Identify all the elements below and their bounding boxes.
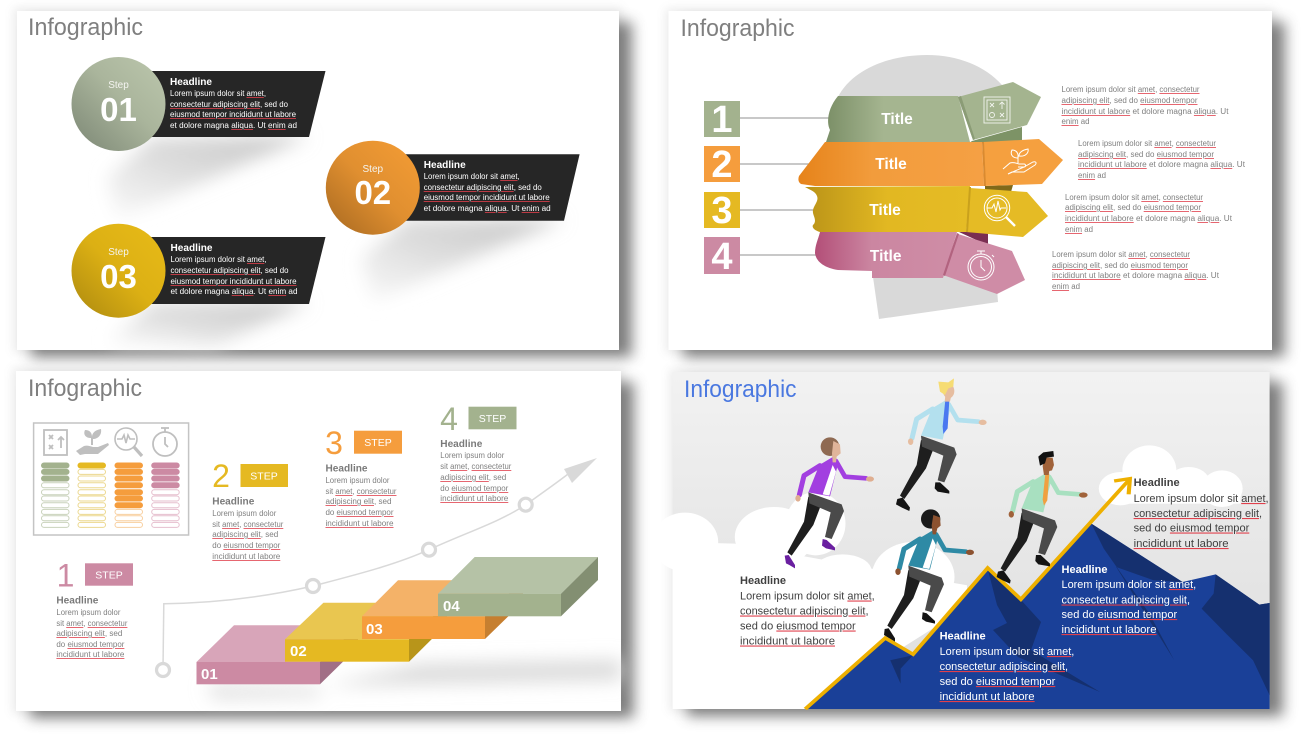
step label 3 [325,425,402,528]
text block upper mountain: sed do eiusmod tempor [1062,609,1178,621]
step 03: Headline [170,242,213,254]
step label 3: incididunt ut labore [326,519,394,528]
text block lower mountain: Lorem ipsum dolor sit amet, [940,646,1074,658]
description 3: Lorem ipsum dolor sit amet, consectetur [1065,193,1203,202]
number tiles [704,99,740,278]
step 01: Headline [170,76,212,88]
step label 2: sit amet, consectetur [212,520,284,529]
band 2 [798,139,1063,186]
mountain shaded facets upper and right [890,524,1270,695]
band 3: Title [869,202,901,219]
step label 4: STEP [479,413,506,425]
text block lower mountain: consectetur adipiscing elit, [940,661,1068,673]
text block left cloud: Headline [740,575,786,587]
clouds [652,445,1243,709]
step 02: 02 [354,174,391,211]
step 01: et dolore magna aliqua. Ut enim ad [170,121,297,130]
connector lines [740,118,830,255]
text block lower mountain: sed do eiusmod tempor [940,676,1056,688]
text block summit: incididunt ut labore [1134,538,1229,550]
step label 1: do eiusmod tempor [56,640,125,649]
number tiles: 4 [711,236,733,278]
head silhouette [838,55,1002,319]
step label 3: do eiusmod tempor [326,508,394,517]
description 2: Lorem ipsum dolor sit amet, consectetur [1078,139,1216,148]
step label 4: Lorem ipsum dolor [440,451,505,460]
text block upper mountain: Headline [1062,564,1108,576]
step label 1: sit amet, consectetur [56,619,128,628]
step label 3: sit amet, consectetur [326,487,397,496]
step label 2 [212,458,288,561]
step label 3: Headline [326,462,368,474]
text block left cloud [740,575,875,648]
step 01 [72,57,326,151]
step 03: Step [108,247,129,258]
step label 3: STEP [364,437,392,449]
mountain shaded facet centre [988,570,1100,692]
step 02: Step [363,164,384,175]
3D step 03: 03 [366,621,383,638]
column: green pills [42,463,69,527]
3D step 04 [438,557,598,616]
step label 2: adipiscing elit, sed [212,530,278,539]
step label 2: do eiusmod tempor [212,541,281,550]
step 02: Lorem ipsum dolor sit amet, [424,172,520,181]
description 2 [1078,139,1246,180]
icon: magnifier grey [115,428,142,456]
step 03: et dolore magna aliqua. Ut enim ad [170,287,298,296]
step 03: Lorem ipsum dolor sit amet, [170,255,266,264]
step label 3: 3 [325,425,343,461]
text block left cloud: incididunt ut labore [740,636,835,648]
step 03: eiusmod tempor incididunt ut labore [170,277,297,286]
step 01: 01 [100,91,137,128]
description 2: enim ad [1078,171,1106,180]
title: Infographic [28,14,143,41]
step 01: eiusmod tempor incididunt ut labore [170,110,297,119]
step 02: consectetur adipiscing elit, sed do [424,183,542,192]
step 02: eiusmod tempor incididunt ut labore [424,193,550,202]
icon: magnifier with pulse [984,195,1015,226]
icon: strategy map [984,97,1010,123]
step label 1: Headline [56,594,99,606]
step 02: Headline [424,159,466,171]
text block lower mountain [940,630,1074,703]
description 1: Lorem ipsum dolor sit amet, consectetur [1062,85,1200,94]
rising yellow arrow [805,479,1130,709]
description 3: adipiscing elit, sed do eiusmod tempor [1065,203,1201,212]
icon: hand with plant [1003,149,1036,174]
text block left cloud: sed do eiusmod tempor [740,620,856,632]
band 2: Title [875,156,907,173]
step label 3: Lorem ipsum dolor [326,476,390,485]
description 4 [1052,250,1220,291]
mountain range [805,524,1270,709]
text block left cloud: Lorem ipsum dolor sit amet, [740,590,875,602]
step label 4: adipiscing elit, sed [440,473,506,482]
text block upper mountain: incididunt ut labore [1062,624,1156,636]
step 02 [326,141,580,235]
panel: mountain climb [652,372,1270,709]
number tiles: 1 [711,99,733,141]
back folds [959,127,1022,244]
band 1 [826,82,1041,142]
number tiles: 2 [711,144,733,186]
column: yellow pills [78,463,106,527]
text block summit: consectetur adipiscing elit, [1134,508,1262,520]
text block upper mountain: Lorem ipsum dolor sit amet, [1062,579,1196,591]
text block upper mountain [1062,564,1196,636]
3D step 02: 02 [290,643,307,660]
description 1 [1062,85,1229,126]
3D step 01 [196,625,358,684]
description 1: adipiscing elit, sed do eiusmod tempor [1062,96,1198,105]
step label 2: STEP [250,470,278,482]
step label 2: 2 [212,458,230,494]
step label 3: adipiscing elit, sed [326,497,392,506]
text block lower mountain: Headline [940,630,986,642]
step label 1: adipiscing elit, sed [56,629,122,638]
description 4: incididunt ut labore et dolore magna aliqua. Ut [1052,271,1220,280]
text block summit: sed do eiusmod tempor [1134,522,1250,534]
step 02: et dolore magna aliqua. Ut enim ad [424,204,551,213]
text block left cloud: consectetur adipiscing elit, [740,606,868,618]
description 1: incididunt ut labore et dolore magna aliqua. Ut [1062,107,1229,116]
ground shadow [205,660,621,698]
step label 1: Lorem ipsum dolor [56,608,121,617]
description 1: enim ad [1062,117,1090,126]
icon: hand with plant grey [76,429,109,455]
title: Infographic [680,15,794,42]
step label 1: STEP [95,570,123,582]
icon and progress table [34,423,189,535]
3D step 02 [285,603,447,662]
column: pink pills [152,463,179,527]
icon: stopwatch [968,251,994,280]
step label 4: 4 [440,401,458,437]
title: Infographic [28,375,142,402]
3D step 03 [362,580,523,639]
title: Infographic [684,376,796,403]
description 4: enim ad [1052,282,1080,291]
band 4 [815,232,1025,294]
cast shadows under step banners [108,136,564,346]
panel: circular steps [17,11,619,350]
step label 4 [440,401,516,503]
text block summit: Headline [1134,477,1180,489]
step label 1 [56,558,133,659]
text block lower mountain: incididunt ut labore [940,691,1035,703]
step 03 [72,224,326,318]
description 4: adipiscing elit, sed do eiusmod tempor [1052,261,1188,270]
band 1: Title [881,111,913,128]
number tiles: 3 [711,190,733,232]
step label 4: do eiusmod tempor [440,484,509,493]
step label 2: Lorem ipsum dolor [212,509,277,518]
step 03: 03 [100,258,137,295]
step 01: Step [108,80,129,91]
person: blue shirt [896,378,987,511]
column: orange pills [115,463,142,527]
icon: strategy map grey [44,430,67,455]
description 3: incididunt ut labore et dolore magna aliqua. Ut [1065,214,1233,223]
step label 2: Headline [212,496,254,508]
panel: head profile [668,11,1272,350]
text block upper mountain: consectetur adipiscing elit, [1062,594,1190,606]
3D step 04: 04 [443,598,460,615]
step 01: consectetur adipiscing elit, sed do [170,100,289,109]
step label 4: Headline [440,438,482,450]
step label 2: incididunt ut labore [212,552,281,561]
description 3: enim ad [1065,225,1093,234]
step label 1: incididunt ut labore [56,650,125,659]
text block summit [1134,477,1269,550]
band 3 [805,186,1048,237]
description 3 [1065,193,1233,234]
description 4: Lorem ipsum dolor sit amet, consectetur [1052,250,1190,259]
step label 1: 1 [57,558,74,594]
step label 4: sit amet, consectetur [440,462,512,471]
person: green shirt [997,451,1088,584]
text block summit: Lorem ipsum dolor sit amet, [1134,493,1269,505]
panel: staircase steps [16,371,621,711]
step 03: consectetur adipiscing elit, sed do [170,266,289,275]
icon: stopwatch grey [153,428,177,456]
step label 4: incididunt ut labore [440,494,509,503]
rising arrow path [156,458,597,676]
step 01: Lorem ipsum dolor sit amet, [170,89,266,98]
person: purple jacket [785,437,874,568]
person: teal jacket [884,509,974,642]
3D step 01: 01 [201,666,218,683]
description 2: adipiscing elit, sed do eiusmod tempor [1078,150,1214,159]
band 4: Title [870,248,902,265]
description 2: incididunt ut labore et dolore magna aliqua. Ut [1078,160,1246,169]
